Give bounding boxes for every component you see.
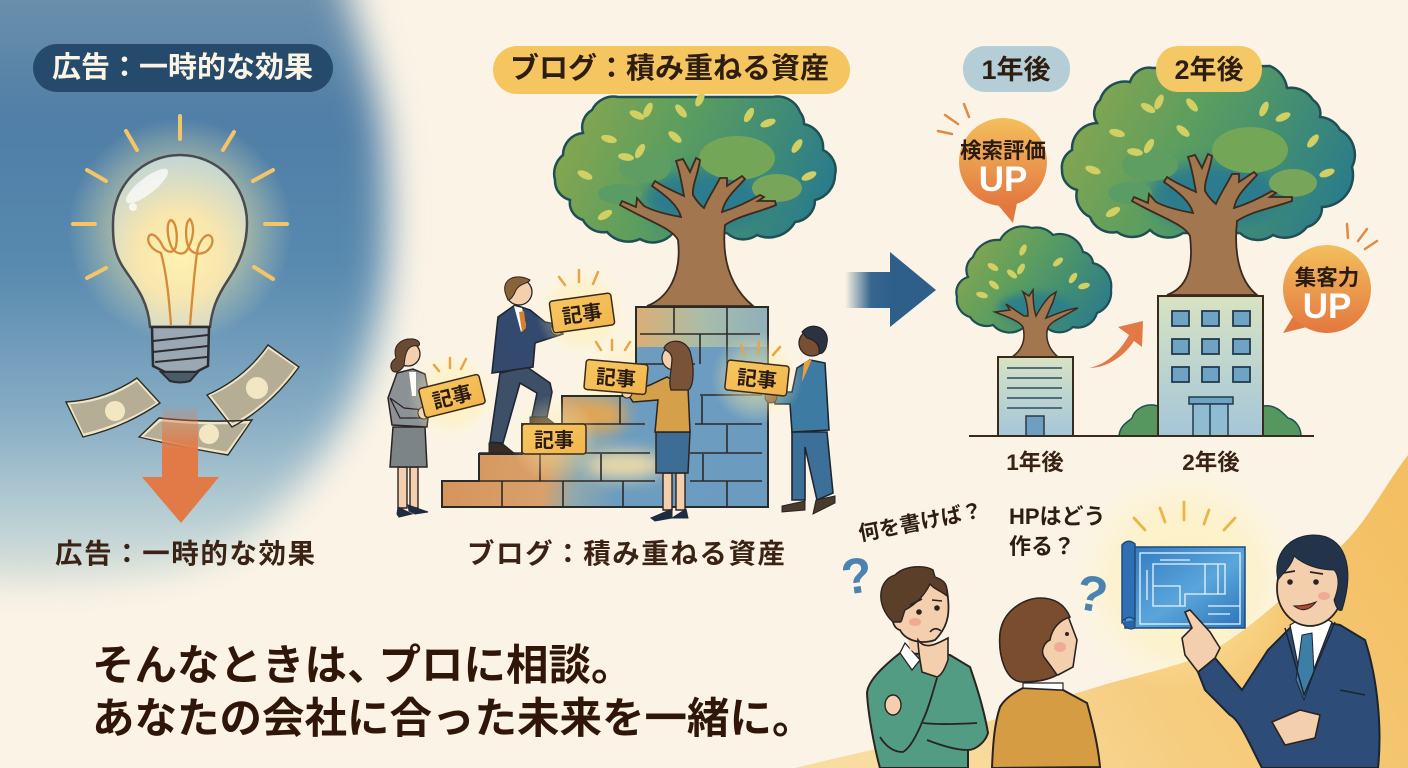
card: 記事 top: [549, 293, 615, 333]
card: 記事 step: [522, 424, 586, 454]
background: blue wash: [0, 0, 387, 583]
article cards: [408, 267, 803, 483]
closing message: [92, 643, 815, 743]
person: woman from behind: [992, 598, 1100, 768]
icon: question mark right: ?: [1072, 564, 1112, 624]
tree: two years: [1062, 66, 1355, 295]
bushes: [1119, 405, 1301, 436]
icon: light bulb: [68, 116, 292, 382]
pill: 1年後: 1年後: [981, 55, 1051, 85]
person: woman in mustard jacket: [622, 341, 693, 521]
tree: one year: [956, 226, 1111, 357]
person: woman in grey suit: [388, 339, 430, 517]
question: how to make HP: HPはどう: [1009, 504, 1106, 529]
bubble: search rating up: 検索評価: [960, 139, 1046, 163]
card: 記事 right: [725, 360, 789, 396]
tree: large: [554, 90, 836, 306]
pill: 2年後: 2年後: [1174, 55, 1244, 85]
card: 記事 centre: 記事: [595, 365, 637, 392]
bubble: search rating up: UP: [979, 160, 1027, 199]
pill: 2年後: [1156, 46, 1262, 92]
bubble: customers up: 集客力: [1295, 266, 1359, 290]
question: how to make HP: [1009, 504, 1106, 559]
card: 記事 right: 記事: [736, 366, 778, 393]
caption: blog: ブログ：積み重ねる資産: [467, 538, 785, 569]
brick wall and stairs: [442, 307, 768, 507]
heading pill: advertising: 広告：一時的な効果: [52, 51, 313, 84]
panel: blog: [388, 46, 850, 569]
bubble: customers up: UP: [1303, 287, 1351, 326]
question: what to write: 何を書けば？: [857, 499, 985, 546]
card: 記事 left: [418, 374, 486, 418]
bubble: customers up: [1283, 224, 1377, 333]
bubble: search rating up: [938, 104, 1047, 223]
heading pill: blog: ブログ：積み重ねる資産: [510, 51, 829, 85]
heading pill: blog: [493, 46, 850, 94]
panel: advertising: [33, 44, 333, 569]
arrow: to growth: [845, 252, 936, 327]
background: yellow wave: [795, 455, 1408, 768]
caption: 1年後: 1年後: [1006, 450, 1064, 475]
card: 記事 centre: [584, 359, 648, 395]
icon: blueprint rays: [1134, 502, 1235, 530]
panel: growth: [938, 46, 1377, 475]
glow behind blueprint: [1070, 465, 1300, 695]
question: how to make HP: 作る？: [1009, 534, 1075, 559]
building: large: [1158, 296, 1263, 436]
icon: question mark left: ?: [838, 546, 876, 606]
card: 記事 top: 記事: [561, 300, 604, 329]
building: small: [998, 357, 1073, 436]
pill: 1年後: [963, 46, 1070, 92]
panel: consultation: [838, 465, 1379, 768]
arrow: decline: [142, 407, 219, 523]
caption: 2年後: 2年後: [1182, 450, 1240, 475]
card: 記事 left: 記事: [430, 381, 475, 413]
icon: falling money: [66, 345, 299, 455]
caption: advertising: 広告：一時的な効果: [55, 538, 315, 569]
closing message: そんなときは、プロに相談。: [92, 643, 634, 690]
heading pill: advertising: [33, 44, 333, 92]
closing message: あなたの会社に合った未来を一緒に。: [92, 696, 815, 743]
card: 記事 step: 記事: [534, 429, 574, 452]
ground line: [969, 435, 1314, 437]
person: man climbing stairs: [489, 277, 563, 453]
person: consultant: [1182, 535, 1379, 768]
arrow: growth up: [1089, 321, 1143, 368]
icon: blueprint: [1122, 541, 1245, 629]
person: man in blue suit: [765, 326, 835, 514]
person: man in green sweater: [867, 567, 988, 768]
